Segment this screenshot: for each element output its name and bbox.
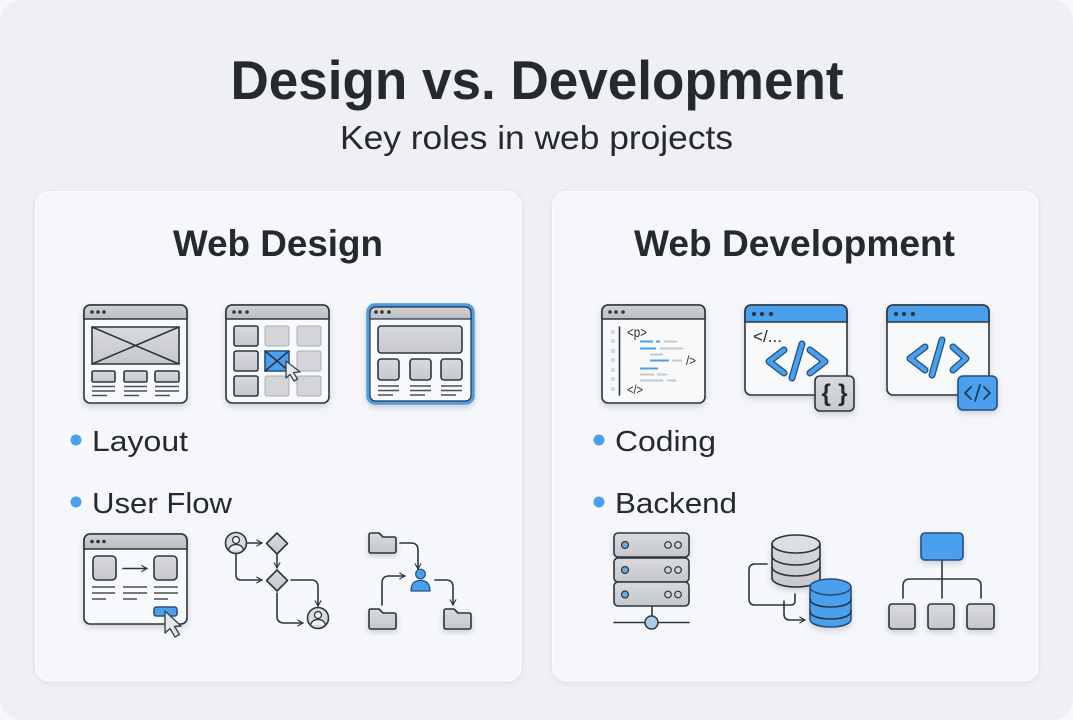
bullet: user flow: User Flow xyxy=(92,488,233,520)
subtitle: Key roles in web projects xyxy=(340,119,733,156)
icon: code window with braces: </... xyxy=(753,327,782,346)
icon: databases xyxy=(749,535,851,627)
bullet: coding: Coding xyxy=(615,426,716,458)
title: Design vs. Development xyxy=(230,49,844,111)
bullet: layout: Layout xyxy=(92,426,188,458)
icon: server rack xyxy=(614,533,689,629)
icon: code editor xyxy=(602,305,705,403)
icon: page flow with button xyxy=(84,534,187,637)
icon: code window with badge xyxy=(887,305,997,410)
icon: code editor: </> xyxy=(627,383,643,397)
icon: code window with braces: { } xyxy=(822,380,848,407)
icon: folders and user xyxy=(369,533,471,629)
icon: flowchart with users xyxy=(226,532,328,628)
panel: web design xyxy=(36,192,521,681)
icon: hierarchy xyxy=(889,533,994,629)
heading: web design: Web Design xyxy=(173,223,383,264)
icon: code window with braces xyxy=(745,305,854,411)
icon: wireframe window xyxy=(84,305,187,403)
panel: web development xyxy=(552,192,1038,681)
icon: selected layout window xyxy=(368,305,473,403)
bullet: backend: Backend xyxy=(615,488,737,520)
heading: web development: Web Development xyxy=(634,223,955,264)
icon: code editor: <p> xyxy=(627,324,647,340)
icon: code editor: /> xyxy=(686,353,696,368)
icon: grid with cursor xyxy=(226,305,329,403)
